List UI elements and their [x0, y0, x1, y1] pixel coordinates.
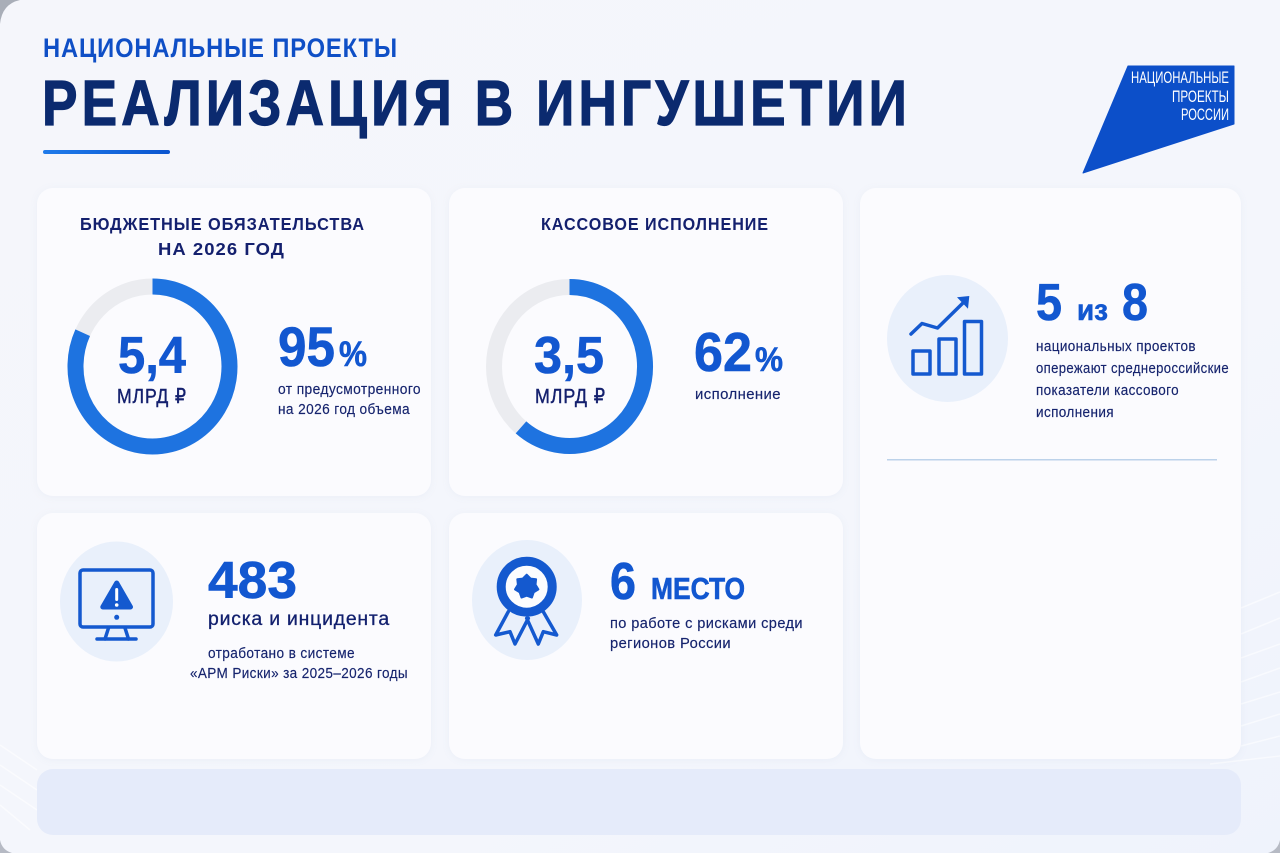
stat description: опережают среднероссийские — [1036, 361, 1229, 377]
stat: 5 of 8: 8 — [1122, 274, 1148, 332]
stat: 95 percent: 95 — [278, 315, 335, 378]
donut value: 3,5 — [534, 327, 604, 385]
stat: 95 percent: % — [339, 335, 367, 374]
stat description — [190, 646, 408, 682]
panel: budget commitments — [37, 188, 431, 496]
panel: risks and incidents — [37, 513, 431, 759]
stat description: по работе с рисками среди — [610, 616, 803, 632]
logo: national projects: РОССИИ — [1181, 105, 1229, 124]
icon: award rosette — [472, 540, 582, 660]
stat: 6th place — [610, 553, 745, 611]
stat: 5 of 8: 5 — [1036, 274, 1062, 332]
stat: 5 of 8 — [1036, 274, 1148, 332]
heading: budget commitments: НА 2026 ГОД — [158, 239, 285, 259]
stat description: регионов России — [610, 636, 731, 652]
stat: 6th place: 6 — [610, 553, 636, 611]
donut value: МЛРД ₽ — [117, 386, 187, 408]
donut chart: 3,5 billion — [494, 287, 645, 446]
title: РЕАЛИЗАЦИЯ В ИНГУШЕТИИ — [42, 67, 911, 139]
logo: national projects: ПРОЕКТЫ — [1172, 87, 1229, 106]
heading: budget commitments: БЮДЖЕТНЫЕ ОБЯЗАТЕЛЬСТВА — [80, 214, 365, 234]
stat description: исполнение — [695, 387, 781, 403]
stat description: отработано в системе — [208, 646, 355, 662]
stat: 5 of 8: из — [1077, 294, 1108, 327]
logo: national projects: НАЦИОНАЛЬНЫЕ — [1131, 68, 1229, 87]
stat: 62 percent: 62 — [694, 321, 752, 383]
stat description — [1036, 339, 1229, 421]
stat description: от предусмотренного — [278, 382, 421, 398]
donut value — [117, 327, 187, 408]
title underline — [43, 150, 170, 154]
stat label: риска и инцидента — [208, 608, 390, 630]
stat description: «АРМ Риски» за 2025–2026 годы — [190, 666, 408, 682]
stat: 483: 483 — [208, 552, 297, 610]
stat: 6th place: МЕСТО — [651, 571, 745, 606]
eyebrow heading: НАЦИОНАЛЬНЫЕ ПРОЕКТЫ — [43, 33, 398, 63]
donut value: МЛРД ₽ — [535, 386, 606, 408]
stat description — [610, 616, 803, 652]
panel: cash execution — [449, 188, 843, 496]
stat: 62 percent — [694, 321, 783, 383]
donut value: 5,4 — [118, 327, 186, 385]
stat description: показатели кассового — [1036, 383, 1179, 399]
donut chart: 5,4 billion — [75, 286, 230, 446]
heading: cash execution: КАССОВОЕ ИСПОЛНЕНИЕ — [541, 214, 769, 234]
stat description — [278, 382, 421, 418]
stat: 95 percent — [278, 315, 367, 378]
panel: national projects ahead — [860, 188, 1241, 759]
stat: 62 percent: % — [755, 341, 783, 379]
stat description: исполнения — [1036, 405, 1114, 421]
bottom banner — [37, 769, 1241, 835]
icon: monitor warning — [60, 542, 173, 662]
panel: 6th place — [449, 513, 843, 759]
stat description: национальных проектов — [1036, 339, 1196, 355]
heading: budget commitments — [80, 214, 365, 259]
logo: national projects — [1083, 66, 1234, 173]
stat description: на 2026 год объема — [278, 402, 411, 418]
icon: growth chart — [887, 275, 1008, 402]
